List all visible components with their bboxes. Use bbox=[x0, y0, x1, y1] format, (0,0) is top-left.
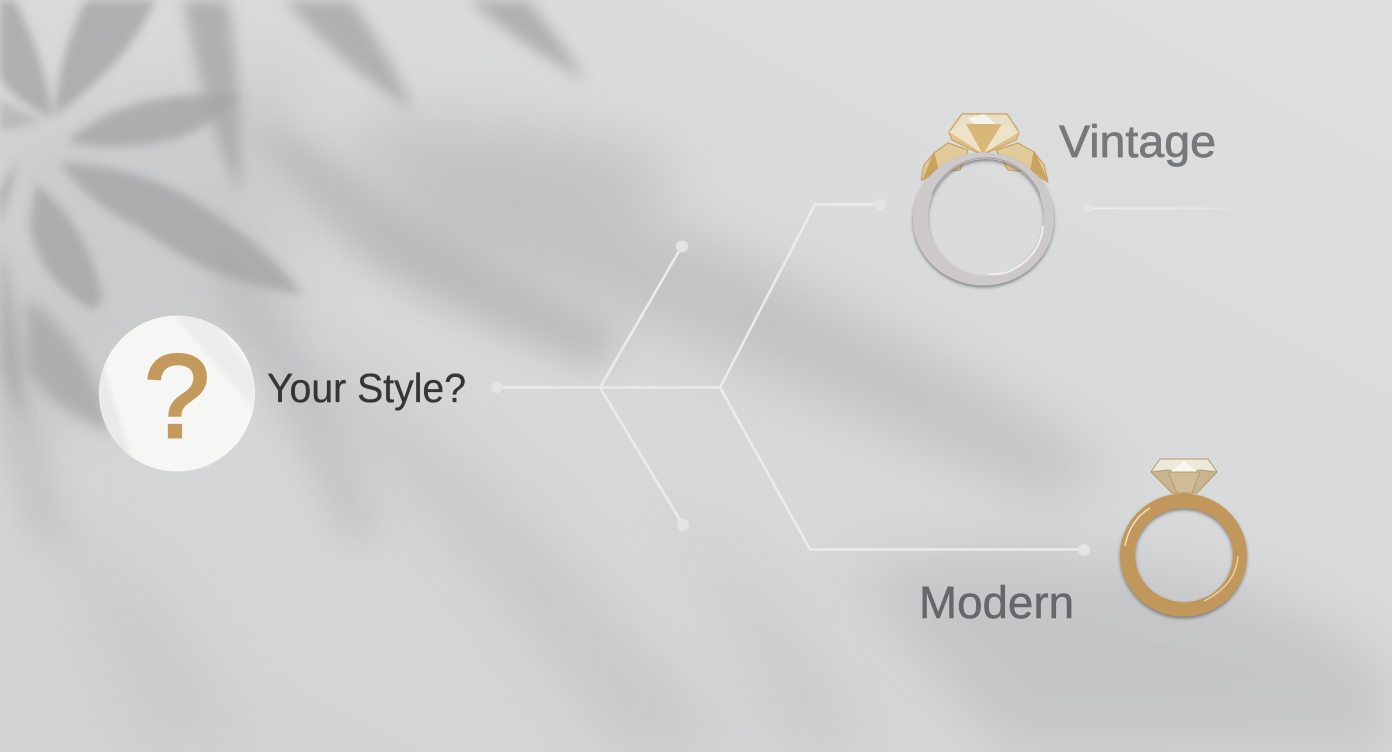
leaves radiating from the stem node bbox=[0, 0, 52, 118]
vintage ring bbox=[913, 114, 1054, 286]
vintage side stones bbox=[921, 143, 1048, 182]
node dots bbox=[492, 199, 1090, 556]
your style label: Your Style? bbox=[267, 365, 466, 411]
vintage connector bbox=[1082, 204, 1252, 214]
modern band bbox=[1120, 494, 1247, 616]
modern ring bbox=[1120, 459, 1247, 616]
vintage diamond bbox=[949, 114, 1019, 155]
connector tree bbox=[492, 199, 1090, 556]
vintage label: Vintage bbox=[1059, 116, 1216, 167]
vintage band bbox=[913, 152, 1054, 286]
modern diamond bbox=[1151, 459, 1217, 493]
question badge bbox=[99, 310, 255, 472]
modern label: Modern bbox=[919, 577, 1074, 628]
question mark: ? bbox=[144, 331, 210, 463]
